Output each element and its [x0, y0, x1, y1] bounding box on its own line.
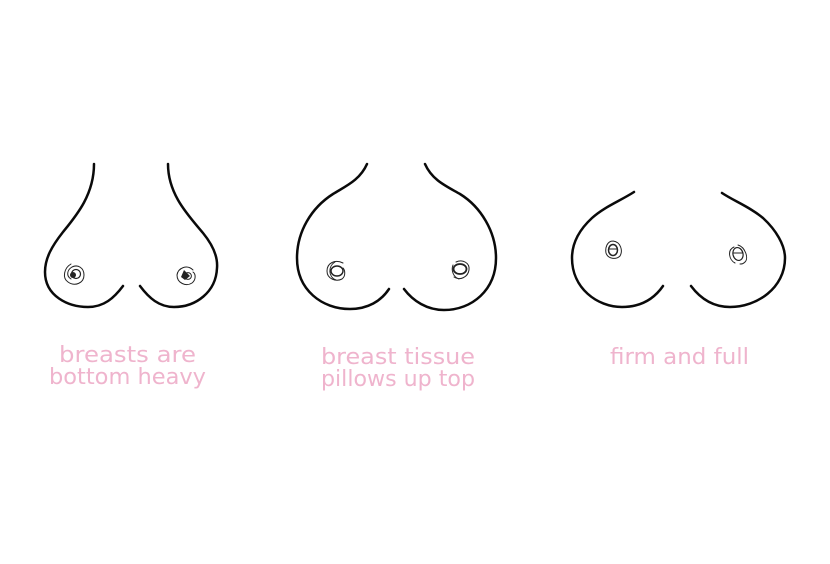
label: breast tissue pillows up top	[321, 345, 475, 392]
label: firm and full: firm and full	[610, 345, 749, 370]
shape 2: pillows up top	[297, 164, 496, 310]
areola left	[64, 264, 84, 284]
label: breasts are bottom heavy: breasts are	[59, 343, 196, 368]
areola left	[327, 261, 345, 280]
shape 3: firm and full	[572, 192, 785, 307]
areola right	[730, 245, 747, 264]
areola right	[177, 267, 195, 285]
areola right	[452, 261, 469, 279]
shape 1: bottom heavy	[45, 164, 217, 307]
label: breast tissue pillows up top: breast tissue	[321, 345, 475, 370]
label: breasts are bottom heavy: bottom heavy	[49, 365, 206, 390]
areola left	[606, 241, 621, 258]
label: breasts are bottom heavy	[49, 343, 206, 390]
label: breast tissue pillows up top: pillows up top	[321, 367, 475, 392]
